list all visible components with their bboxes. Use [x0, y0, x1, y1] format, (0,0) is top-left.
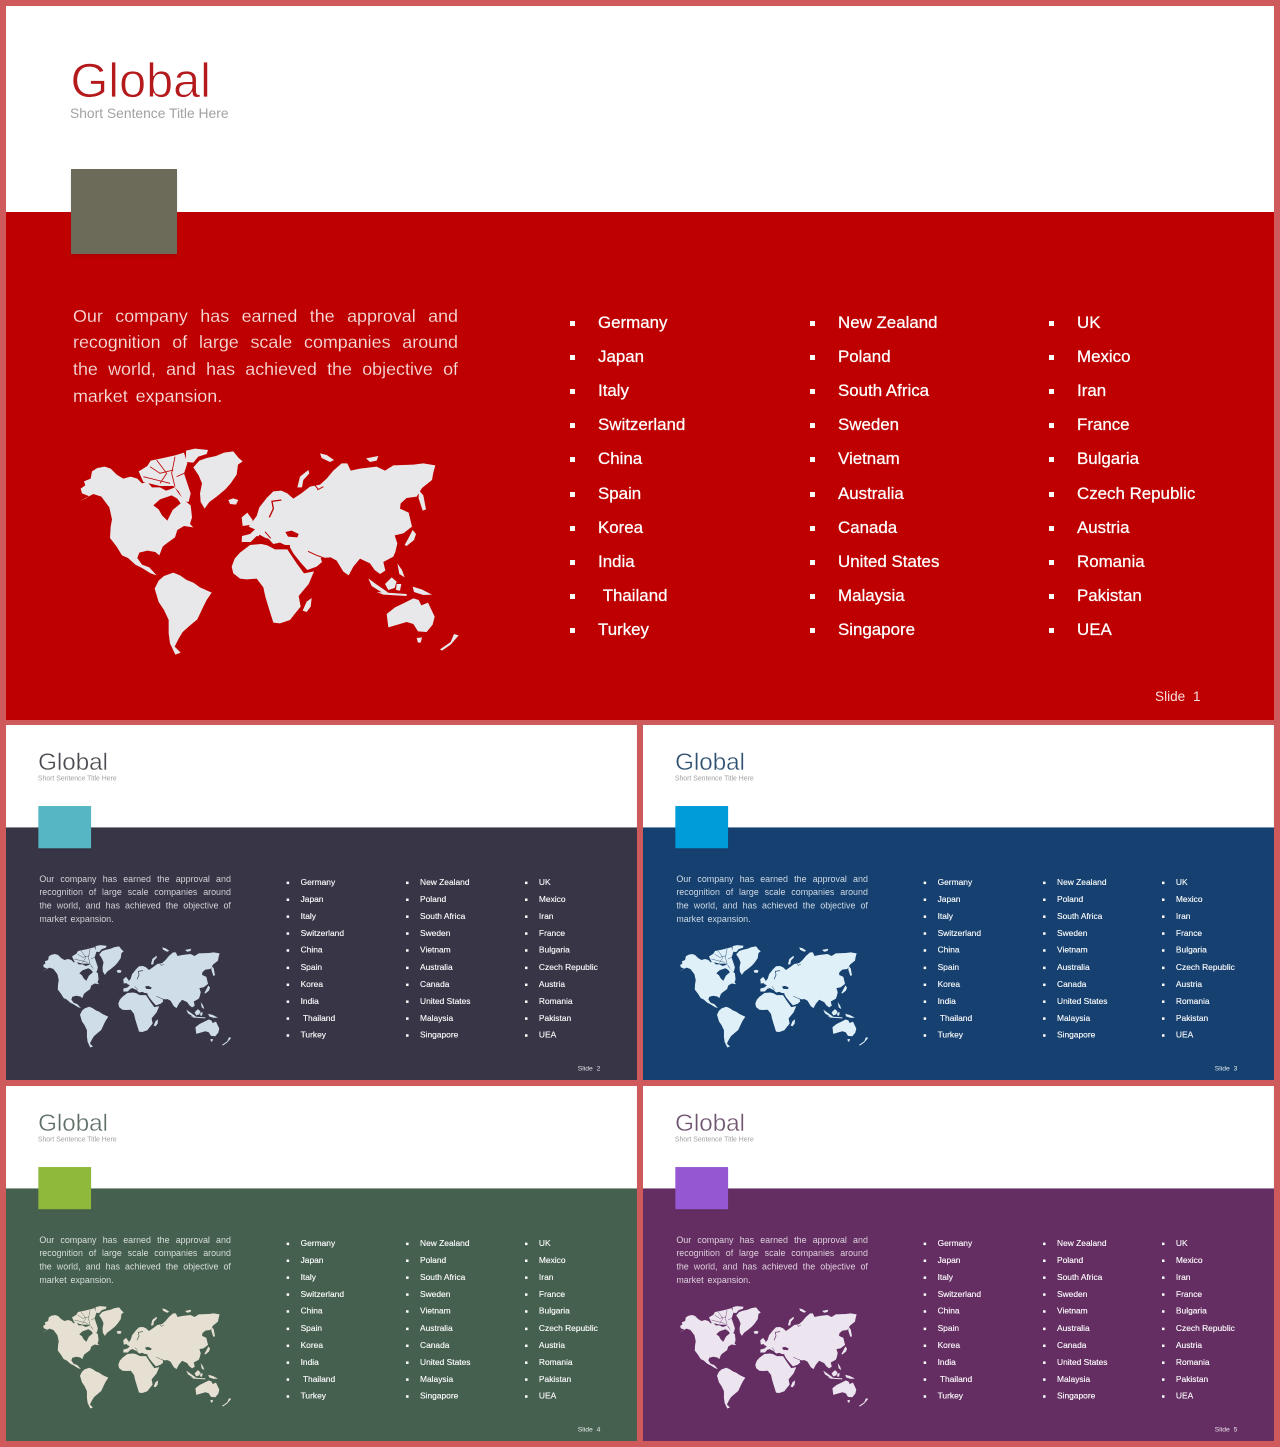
country list column 3: UK	[1176, 1238, 1188, 1248]
country list column 3: Bulgaria	[1077, 449, 1139, 468]
text block: the world, and has achieved the objective of	[39, 901, 231, 911]
country list column 2: South Africa	[838, 381, 929, 400]
country list column 3: Czech Republic	[539, 1323, 598, 1333]
country list column 1	[286, 877, 344, 1040]
text block: Our company has earned the approval and	[73, 306, 458, 326]
country list column 3: Pakistan	[1176, 1013, 1208, 1023]
country list column 3: Romania	[1077, 552, 1145, 571]
country list column 3: Mexico	[1176, 1255, 1203, 1265]
country list column 2: Australia	[1057, 1323, 1090, 1333]
icon: world map	[43, 1306, 232, 1408]
country list column 3: Bulgaria	[539, 1306, 570, 1316]
country list column 2: United States	[838, 552, 939, 571]
text block: the world, and has achieved the objective of	[73, 359, 458, 379]
country list column 3: Austria	[539, 1340, 565, 1350]
country list column 2: Singapore	[1057, 1030, 1095, 1040]
country list column 3: Mexico	[539, 894, 566, 904]
accent square	[675, 1167, 728, 1209]
country list column 2: South Africa	[1057, 911, 1102, 921]
country list column 2: South Africa	[420, 1272, 465, 1282]
text block: the world, and has achieved the objective of	[676, 901, 868, 911]
country list column 2: Poland	[838, 347, 891, 366]
country list column 2: Malaysia	[420, 1013, 453, 1023]
country list column 1: India	[598, 552, 635, 571]
country list column 1: Spain	[598, 484, 641, 503]
country list column 3: France	[1176, 1289, 1202, 1299]
country list column 3: Romania	[539, 996, 573, 1006]
text block: Our company has earned the approval and	[39, 1235, 231, 1245]
country list column 1: Germany	[301, 1238, 335, 1248]
country list column 2: Poland	[420, 1255, 446, 1265]
text block: market expansion.	[676, 914, 751, 924]
slide number: Slide 2	[578, 1065, 600, 1072]
country list column 1: Korea	[938, 979, 960, 989]
country list column 1: Korea	[301, 1340, 323, 1350]
country list column 1: Turkey	[938, 1391, 963, 1401]
country list column 3: Mexico	[1176, 894, 1203, 904]
accent square	[71, 169, 177, 254]
country list column 1: Korea	[301, 979, 323, 989]
country list column 3: Mexico	[1077, 347, 1131, 366]
country list column 2: Sweden	[1057, 928, 1087, 938]
country list column 2: Vietnam	[1057, 945, 1088, 955]
country list column 1: Switzerland	[301, 1289, 344, 1299]
country list column 3: Czech Republic	[1077, 484, 1195, 503]
country list column 1: India	[301, 996, 319, 1006]
country list column 1: Italy	[938, 1272, 953, 1282]
country list column 3: France	[539, 1289, 565, 1299]
title: Global	[675, 1110, 745, 1137]
text block	[39, 1235, 231, 1285]
country list column 1: Turkey	[938, 1030, 963, 1040]
country list column 1: China	[301, 1306, 323, 1316]
country list column 1: Korea	[598, 518, 643, 537]
country list column 1: India	[301, 1357, 319, 1367]
country list column 1: Spain	[301, 1323, 322, 1333]
country list column 1: Germany	[938, 877, 972, 887]
country list column 1: Thailand	[940, 1013, 972, 1023]
country list column 1: Turkey	[301, 1030, 326, 1040]
icon: world map	[680, 1306, 868, 1408]
country list column 2: Vietnam	[420, 945, 451, 955]
subtitle: Short Sentence Title Here	[70, 105, 229, 121]
country list column 1: Spain	[938, 962, 959, 972]
country list column 3: Pakistan	[539, 1013, 571, 1023]
country list column 1: China	[938, 1306, 960, 1316]
country list column 2: United States	[1057, 1357, 1107, 1367]
country list column 2: Singapore	[420, 1391, 458, 1401]
slide number: Slide 3	[1215, 1065, 1237, 1072]
country list column 3	[1162, 877, 1235, 1040]
text block: recognition of large scale companies around	[39, 887, 231, 897]
country list column 1: Switzerland	[301, 928, 344, 938]
text block: market expansion.	[39, 1275, 114, 1285]
country list column 2: Malaysia	[420, 1374, 453, 1384]
country list column 1: Germany	[938, 1238, 972, 1248]
country list column 3: Iran	[1176, 911, 1190, 921]
country list column 3: Bulgaria	[539, 945, 570, 955]
country list column 2: Malaysia	[838, 586, 905, 605]
icon: world map	[42, 945, 232, 1048]
text block	[73, 306, 458, 406]
country list column 3: UEA	[1176, 1391, 1193, 1401]
country list column 2: Vietnam	[838, 449, 900, 468]
text block: market expansion.	[676, 1275, 751, 1285]
country list column 3: Romania	[1176, 1357, 1210, 1367]
text block	[676, 874, 868, 924]
country list column 3: France	[1077, 415, 1130, 434]
country list column 1	[286, 1238, 344, 1401]
country list column 3: Romania	[1176, 996, 1210, 1006]
country list column 2: Poland	[1057, 894, 1083, 904]
text block: market expansion.	[73, 386, 222, 406]
country list column 2: United States	[420, 996, 470, 1006]
accent square	[38, 1167, 91, 1209]
country list column 3: Iran	[539, 1272, 553, 1282]
country list column 2: New Zealand	[838, 312, 938, 332]
slide number: Slide 1	[1155, 689, 1201, 704]
country list column 1: Italy	[301, 1272, 316, 1282]
country list column 1: Japan	[938, 894, 960, 904]
country list column 3: Iran	[1176, 1272, 1190, 1282]
country list column 1: India	[938, 996, 956, 1006]
slide number: Slide 4	[578, 1426, 600, 1433]
country list column 2: United States	[420, 1357, 470, 1367]
country list column 1: Thailand	[303, 1013, 335, 1023]
text block: Our company has earned the approval and	[676, 1235, 868, 1245]
text block: Our company has earned the approval and	[676, 874, 868, 884]
country list column 2	[406, 1238, 470, 1401]
country list column 2: Singapore	[838, 620, 915, 639]
title: Global	[70, 54, 211, 108]
country list column 3: UK	[1077, 312, 1100, 332]
subtitle: Short Sentence Title Here	[675, 774, 754, 782]
country list column 2: Australia	[838, 484, 904, 503]
country list column 1: Turkey	[598, 620, 649, 639]
text block: recognition of large scale companies around	[73, 332, 458, 352]
country list column 1: Japan	[598, 347, 644, 366]
country list column 2: Canada	[420, 979, 449, 989]
country list column 3: Czech Republic	[1176, 962, 1235, 972]
country list column 3: UEA	[539, 1030, 556, 1040]
accent square	[38, 806, 91, 848]
country list column 2: Sweden	[838, 415, 899, 434]
country list column 2: United States	[1057, 996, 1107, 1006]
country list column 2: Poland	[1057, 1255, 1083, 1265]
title: Global	[38, 1110, 108, 1137]
country list column 2: Malaysia	[1057, 1013, 1090, 1023]
country list column 1: Germany	[301, 877, 335, 887]
country list column 3: UEA	[1176, 1030, 1193, 1040]
country list column 1: Spain	[301, 962, 322, 972]
title: Global	[675, 749, 745, 776]
country list column 1: Italy	[938, 911, 953, 921]
text block: the world, and has achieved the objective of	[39, 1262, 231, 1272]
country list column 3: UK	[539, 877, 551, 887]
panel: slide 3 navy	[643, 725, 1274, 1080]
subtitle: Short Sentence Title Here	[675, 1135, 754, 1143]
text block: recognition of large scale companies around	[39, 1248, 231, 1258]
country list column 3: Romania	[539, 1357, 573, 1367]
country list column 1: Thailand	[603, 586, 667, 605]
icon: world map	[80, 448, 459, 655]
country list column 2: Australia	[420, 962, 453, 972]
country list column 2: Canada	[1057, 1340, 1086, 1350]
country list column 1	[570, 312, 685, 639]
country list column 2: Malaysia	[1057, 1374, 1090, 1384]
country list column 3: Czech Republic	[539, 962, 598, 972]
subtitle: Short Sentence Title Here	[38, 1135, 117, 1143]
country list column 2	[1043, 877, 1108, 1040]
country list column 1: China	[938, 945, 960, 955]
country list column 1	[924, 1238, 981, 1401]
country list column 2: Canada	[420, 1340, 449, 1350]
country list column 3	[525, 1238, 598, 1401]
country list column 3: Iran	[539, 911, 553, 921]
country list column 1: Switzerland	[938, 928, 981, 938]
country list column 1	[924, 877, 981, 1040]
country list column 2	[406, 877, 470, 1040]
text block	[676, 1235, 868, 1285]
text block: market expansion.	[39, 914, 114, 924]
country list column 3: UEA	[1077, 620, 1112, 639]
country list column 2: Singapore	[420, 1030, 458, 1040]
country list column 2: Vietnam	[420, 1306, 451, 1316]
icon: world map	[680, 945, 868, 1048]
country list column 2	[810, 312, 939, 639]
country list column 3: UK	[1176, 877, 1188, 887]
country list column 2: Sweden	[420, 928, 450, 938]
country list column 3	[1162, 1238, 1235, 1401]
country list column 1: China	[598, 449, 642, 468]
country list column 1: Switzerland	[598, 415, 685, 434]
country list column 3: France	[539, 928, 565, 938]
country list column 2: New Zealand	[420, 877, 470, 887]
country list column 2: Australia	[1057, 962, 1090, 972]
accent square	[675, 806, 728, 848]
country list column 1: Germany	[598, 312, 667, 332]
country list column 1: Italy	[598, 381, 629, 400]
country list column 1: Korea	[938, 1340, 960, 1350]
country list column 2: Australia	[420, 1323, 453, 1333]
country list column 3: Pakistan	[1077, 586, 1142, 605]
slide number: Slide 5	[1215, 1426, 1237, 1433]
country list column 1: Turkey	[301, 1391, 326, 1401]
country list column 1: China	[301, 945, 323, 955]
subtitle: Short Sentence Title Here	[38, 774, 117, 782]
country list column 3: Iran	[1077, 381, 1106, 400]
country list column 3: Bulgaria	[1176, 1306, 1207, 1316]
country list column 1: Japan	[301, 1255, 323, 1265]
text block: recognition of large scale companies around	[676, 887, 868, 897]
country list column 3: Mexico	[539, 1255, 566, 1265]
text block: Our company has earned the approval and	[39, 874, 231, 884]
country list column 1: Switzerland	[938, 1289, 981, 1299]
country list column 3: Austria	[1176, 979, 1202, 989]
text block	[39, 874, 231, 924]
country list column 3: France	[1176, 928, 1202, 938]
panel: slide 1 red	[6, 6, 1274, 720]
country list column 2: Sweden	[1057, 1289, 1087, 1299]
country list column 1: Thailand	[303, 1374, 335, 1384]
country list column 2: Canada	[1057, 979, 1086, 989]
country list column 3	[1049, 312, 1195, 639]
panel: slide 4 green	[6, 1086, 637, 1441]
country list column 2: New Zealand	[1057, 877, 1107, 887]
country list column 3: Pakistan	[539, 1374, 571, 1384]
country list column 2: Sweden	[420, 1289, 450, 1299]
title: Global	[38, 749, 108, 776]
country list column 3: UEA	[539, 1391, 556, 1401]
country list column 2: Singapore	[1057, 1391, 1095, 1401]
country list column 2: Poland	[420, 894, 446, 904]
country list column 2: South Africa	[1057, 1272, 1102, 1282]
country list column 3	[525, 877, 598, 1040]
country list column 1: Japan	[301, 894, 323, 904]
country list column 2: New Zealand	[1057, 1238, 1107, 1248]
country list column 2: South Africa	[420, 911, 465, 921]
country list column 1: Italy	[301, 911, 316, 921]
country list column 1: Japan	[938, 1255, 960, 1265]
text block: recognition of large scale companies around	[676, 1248, 868, 1258]
country list column 3: Bulgaria	[1176, 945, 1207, 955]
country list column 1: Spain	[938, 1323, 959, 1333]
country list column 1: Thailand	[940, 1374, 972, 1384]
country list column 3: UK	[539, 1238, 551, 1248]
panel: slide 2 charcoal	[6, 725, 637, 1080]
country list column 3: Czech Republic	[1176, 1323, 1235, 1333]
country list column 3: Austria	[1176, 1340, 1202, 1350]
country list column 3: Austria	[539, 979, 565, 989]
text block: the world, and has achieved the objective of	[676, 1262, 868, 1272]
country list column 3: Austria	[1077, 518, 1130, 537]
country list column 1: India	[938, 1357, 956, 1367]
country list column 2: Canada	[838, 518, 897, 537]
country list column 3: Pakistan	[1176, 1374, 1208, 1384]
panel: slide 5 purple	[643, 1086, 1274, 1441]
country list column 2	[1043, 1238, 1108, 1401]
country list column 2: Vietnam	[1057, 1306, 1088, 1316]
country list column 2: New Zealand	[420, 1238, 470, 1248]
